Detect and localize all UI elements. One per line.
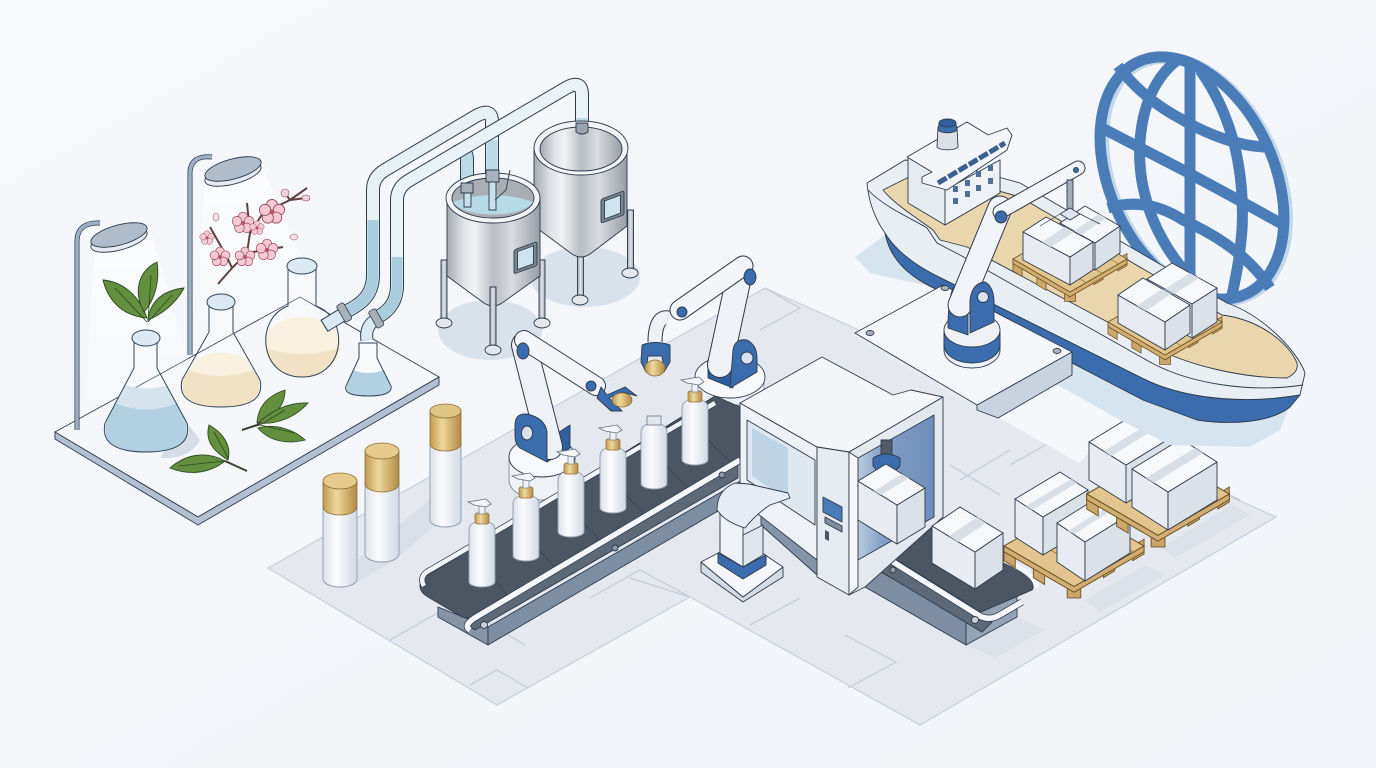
icon: cargo ship (867, 160, 1305, 422)
robot arm: capping (509, 340, 637, 500)
conveyor belt: packing line (761, 440, 1036, 645)
icon: inspection gate (740, 357, 943, 595)
icon: gate robot gripper with cap (873, 440, 900, 487)
icon: leaves on table (170, 390, 308, 472)
icon: small blue flask (346, 320, 391, 396)
icon: pump bottles on conveyor (468, 377, 708, 587)
icon: box on packing line (932, 507, 1003, 589)
ship shadow (855, 235, 1290, 447)
icon: rear mixing tank (534, 121, 638, 305)
cargo on ship: front pallet (1108, 263, 1222, 364)
bottle shadows (352, 500, 462, 585)
robot arm: ship loader (944, 168, 1100, 368)
icon: scanner kiosk (701, 483, 790, 602)
icon: globe (1064, 27, 1323, 330)
cargo on ship: rear pallet (1013, 206, 1127, 301)
icon: box inside gate (858, 464, 925, 544)
icon: cherry blossom branch (200, 188, 310, 284)
robot arm: pick and place (641, 266, 765, 405)
pallet stack at right (1087, 414, 1229, 547)
icon: grow lamp right (190, 152, 320, 355)
conveyor belt: bottling line (420, 396, 742, 645)
factory floor (268, 288, 1276, 725)
tank shadows (438, 247, 640, 360)
icon: ship superstructure (907, 119, 1012, 225)
pallet stack near lower right (1004, 472, 1144, 598)
process pipes (345, 85, 582, 318)
loading platform (855, 285, 1072, 418)
icon: round cream flask (265, 258, 341, 377)
icon: large blue flask (104, 330, 200, 458)
panel: lab table (55, 297, 439, 525)
icon: grow lamp left (77, 218, 205, 430)
icon: tall gold-capped bottles (323, 404, 461, 587)
icon: cream flask (181, 294, 261, 407)
icon: leaves beside lamp (103, 262, 184, 322)
icon: pipe valve joints (324, 302, 384, 329)
icon: front mixing tank (436, 170, 550, 355)
floor highlight patch (998, 387, 1120, 463)
conveyor shadow and pallet shadows (966, 505, 1250, 658)
